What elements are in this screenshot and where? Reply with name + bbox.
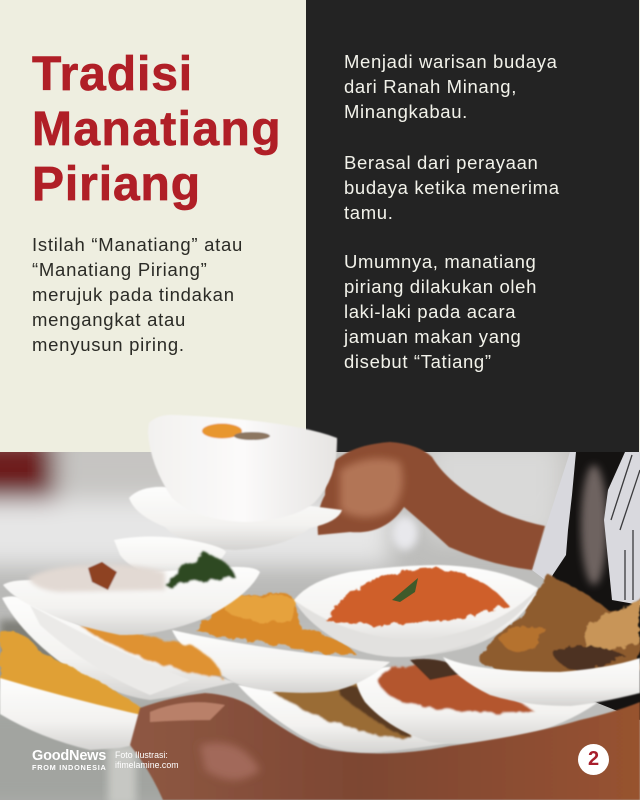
page number badge: [578, 744, 609, 775]
plate: second left tilted: [2, 596, 235, 700]
text block: definition of Manatiang: merujuk pada tindakan: [32, 284, 235, 305]
text block: cultural heritage: [344, 51, 558, 122]
text block: definition of Manatiang: menyusun piring.: [32, 334, 185, 355]
lower hand and forearm: [130, 693, 640, 800]
food: yellow tempeh on front plate: [0, 631, 152, 724]
text block: definition of Manatiang: [32, 234, 243, 355]
plate: centre: [172, 630, 390, 693]
text block: who performs it: Umumnya, manatiang: [344, 251, 536, 272]
title: Manatiang: [32, 103, 282, 156]
shirt: [532, 452, 640, 720]
plates of food stack: [0, 536, 640, 753]
text block: who performs it: jamuan makan yang: [344, 326, 521, 347]
plate: lower right: [355, 659, 597, 744]
panel: cream title background: [0, 0, 306, 452]
text block: cultural heritage: Minangkabau.: [344, 101, 468, 122]
small white bowl: [114, 536, 226, 580]
plate: top centre right: [294, 565, 538, 657]
text block: who performs it: disebut “Tatiang”: [344, 351, 492, 372]
text block: origin: budaya ketika menerima: [344, 177, 560, 198]
food: red chilli chicken on top plate: [294, 565, 538, 657]
photo credit: ifimelamine.com: [115, 760, 179, 770]
page number badge: 2: [588, 748, 599, 770]
logo: GoodNews from Indonesia: FROM INDONESIA: [32, 763, 107, 772]
plate: right: [443, 657, 640, 706]
text block: origin: Berasal dari perayaan: [344, 152, 538, 173]
text block: who performs it: [344, 251, 537, 372]
title: Tradisi: [32, 48, 193, 101]
photo credit: [115, 750, 179, 770]
panel: dark text background: [306, 0, 639, 452]
text block: definition of Manatiang: mengangkat atau: [32, 309, 186, 330]
photo background: [0, 440, 640, 800]
text block: definition of Manatiang: Istilah “Manatiang” atau: [32, 234, 243, 255]
food: fried fish on right plate: [480, 575, 640, 676]
text block: cultural heritage: dari Ranah Minang,: [344, 76, 517, 97]
plate: top left with rice and greens: [3, 553, 260, 635]
text block: who performs it: piriang dilakukan oleh: [344, 276, 537, 297]
title: [32, 48, 282, 211]
saucer under bowl: [129, 487, 342, 550]
logo: GoodNews from Indonesia: GoodNews: [32, 748, 106, 764]
text block: who performs it: laki-laki pada acara: [344, 301, 516, 322]
photo credit: Foto Ilustrasi:: [115, 750, 168, 760]
text block: origin: [344, 152, 560, 223]
title: Piriang: [32, 158, 201, 211]
text block: origin: tamu.: [344, 202, 393, 223]
photo: waiter carrying stacked plates of food: [0, 415, 640, 800]
text block: definition of Manatiang: “Manatiang Piriang”: [32, 259, 208, 280]
text block: cultural heritage: Menjadi warisan budaya: [344, 51, 558, 72]
white bowl with orange soup: [148, 415, 337, 522]
food: golden fritters on centre plate: [195, 594, 357, 655]
plate: lower centre: [238, 679, 455, 753]
upper arm and hand: [318, 442, 545, 570]
logo: GoodNews from Indonesia: [32, 748, 107, 772]
plate: front left: [0, 678, 188, 750]
